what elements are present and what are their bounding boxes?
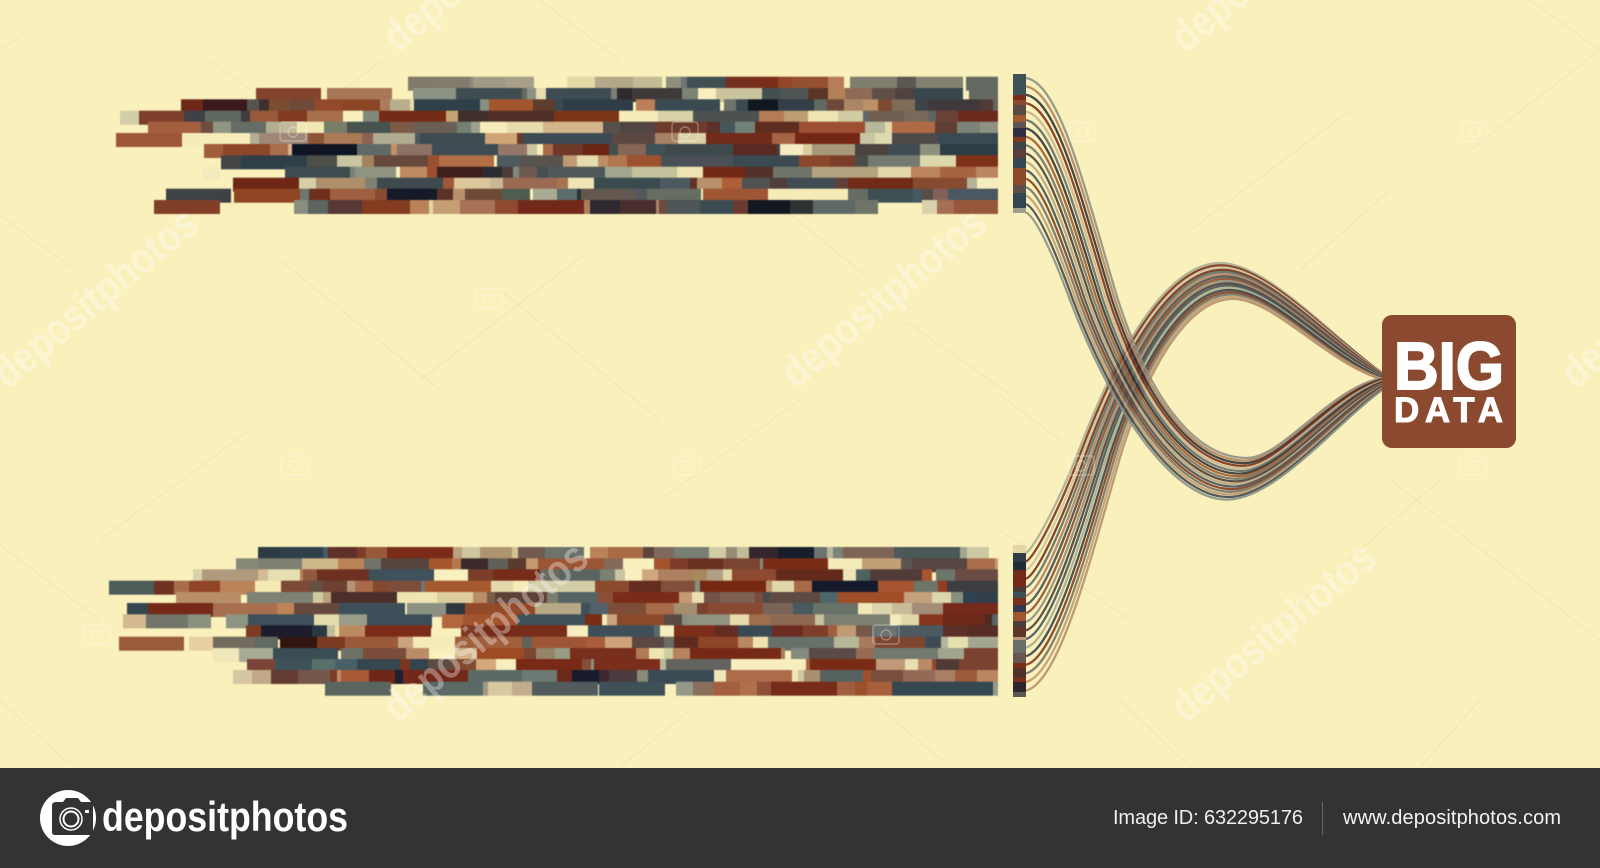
vertical colour strip: top: [1013, 74, 1026, 213]
vertical colour strip: bottom: [1013, 545, 1026, 697]
logo wordmark: depositphotos: [102, 793, 348, 840]
badge: BIG DATA: BIG: [1394, 329, 1504, 404]
ribbon: strands from the top block, falling to the lower arc: [1026, 78, 1382, 500]
ribbon: strands from the bottom block, rising to the upper arc: [1026, 263, 1382, 691]
footer bar: [0, 768, 1600, 868]
badge: BIG DATA: [1382, 315, 1516, 448]
watermarks: depositphotos: [1161, 532, 1385, 732]
website: www.depositphotos.com: [1342, 807, 1561, 829]
image id: Image ID: 632295176: [1113, 807, 1303, 829]
watermarks: depositphotos: [373, 532, 597, 732]
data bars: top block: [116, 77, 998, 214]
watermark camera icons: [84, 122, 1488, 644]
watermarks: depositphotos: [771, 198, 995, 398]
data bars: bottom block: [109, 547, 998, 696]
icon: camera logo: [40, 790, 96, 846]
badge: BIG DATA: DATA: [1394, 391, 1503, 430]
